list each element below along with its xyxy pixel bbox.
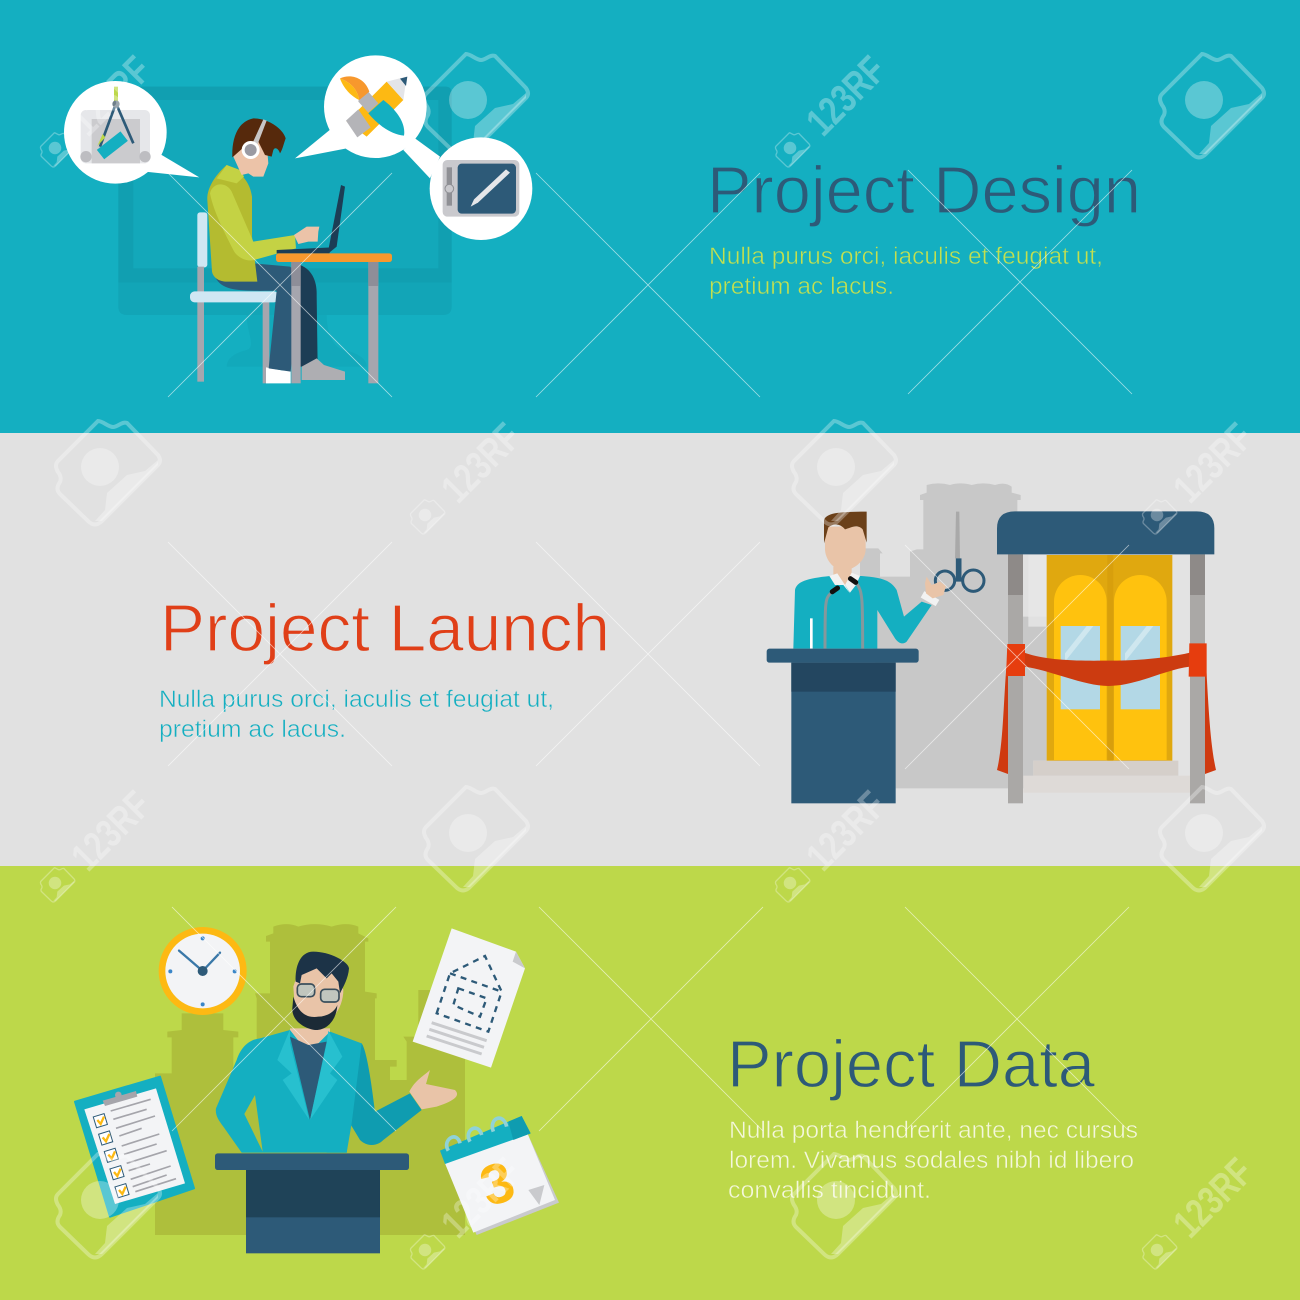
scissors bbox=[925, 512, 984, 598]
heading: project design: Project Design bbox=[707, 153, 1141, 228]
text: 123RF bbox=[433, 1150, 529, 1246]
checklist clipboard bbox=[75, 1077, 194, 1217]
speech bubble: blueprint bbox=[64, 81, 199, 184]
text: 123RF bbox=[798, 783, 894, 879]
illustration: ribbon cutting bbox=[767, 483, 1216, 803]
monitor backdrop bbox=[118, 87, 452, 367]
text block: data description bbox=[728, 1117, 1138, 1204]
text: 123RF bbox=[1165, 1150, 1261, 1246]
panel: project launch bbox=[0, 433, 1300, 866]
canopy and posts bbox=[997, 511, 1214, 803]
wall clock bbox=[159, 927, 247, 1015]
text block: launch description: Nulla purus orci, iaculis et feugiat ut, bbox=[159, 686, 554, 713]
text: 123RF bbox=[1165, 415, 1261, 511]
text: 123RF bbox=[433, 415, 529, 511]
tear-off calendar bbox=[440, 1116, 559, 1235]
panel: project design bbox=[0, 0, 1300, 433]
building silhouette bbox=[860, 483, 1047, 788]
document with house plan bbox=[413, 928, 525, 1068]
presenter figure bbox=[216, 952, 457, 1153]
designer figure bbox=[207, 118, 345, 383]
speech bubble: brush and pencil bbox=[295, 55, 427, 158]
chair bbox=[190, 212, 279, 383]
lectern bbox=[215, 1153, 409, 1253]
text block: design description: Nulla purus orci, iaculis et feugiat ut, bbox=[709, 243, 1103, 270]
text block: launch description bbox=[159, 686, 554, 743]
text block: design description bbox=[709, 243, 1103, 300]
tear-off calendar: 3 bbox=[473, 1150, 522, 1219]
panel: project data bbox=[0, 866, 1300, 1300]
speaker figure bbox=[793, 512, 939, 649]
heading: project data: Project Data bbox=[727, 1027, 1096, 1102]
text block: data description: convallis tincidunt. bbox=[728, 1177, 931, 1204]
text block: launch description: pretium ac lacus. bbox=[159, 716, 346, 743]
lectern bbox=[767, 649, 919, 803]
heading: project launch: Project Launch bbox=[160, 591, 610, 666]
illustration: presenter with documents bbox=[75, 924, 559, 1253]
text: 123RF bbox=[798, 48, 894, 144]
text block: data description: lorem. Vivamus sodales nibh id libero bbox=[729, 1147, 1134, 1174]
illustration: designer at desk bbox=[64, 55, 532, 383]
text block: data description: Nulla porta hendrerit ante, nec cursus bbox=[729, 1117, 1138, 1144]
text: 123RF bbox=[63, 783, 159, 879]
text: 123RF bbox=[63, 48, 159, 144]
text block: design description: pretium ac lacus. bbox=[709, 273, 894, 300]
building silhouette bbox=[155, 924, 465, 1235]
doorway bbox=[1023, 555, 1190, 793]
desk bbox=[276, 253, 392, 383]
red ribbon bbox=[997, 643, 1216, 774]
speech bubble: graphics tablet bbox=[403, 137, 532, 240]
laptop bbox=[277, 185, 345, 253]
